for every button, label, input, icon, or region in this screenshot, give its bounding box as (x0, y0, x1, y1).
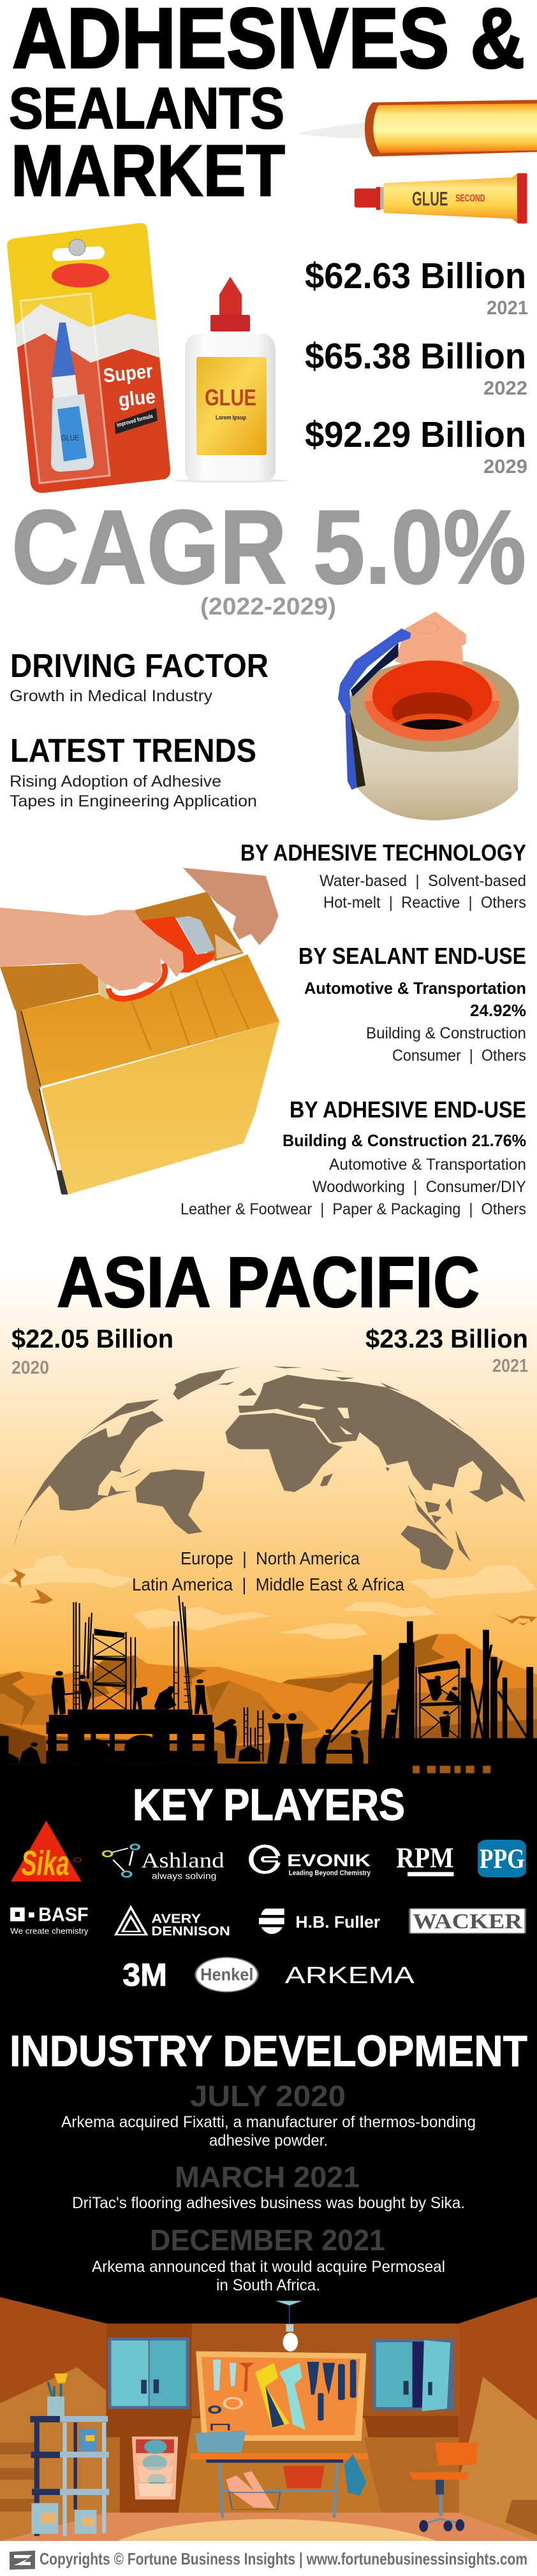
driving factor: DRIVING FACTOR (10, 648, 268, 685)
logo: Sika (11, 1821, 82, 1883)
segmentation: by sealant end-use: Consumer | Others (392, 1047, 526, 1065)
segmentation: by sealant end-use: 24.92% (470, 1001, 526, 1020)
logo: Arkema: ARKEMA (285, 1961, 415, 1988)
development: March 2021 (72, 2160, 465, 2212)
illustration: workshop (0, 2289, 537, 2542)
segmentation: by sealant end-use: Building & Construction (366, 1024, 526, 1042)
workbench (190, 2424, 368, 2518)
regional list: Europe | North America (180, 1548, 360, 1568)
regional values: 2021 (492, 1356, 528, 1376)
development: July 2020: JULY 2020 (190, 2079, 346, 2113)
icon: glue bottle (173, 277, 288, 483)
logo: Sika: Sika (21, 1844, 69, 1883)
development: March 2021: DriTac's flooring adhesives business was bought by Sika. (72, 2194, 465, 2212)
logo: PPG (478, 1840, 526, 1877)
logo: Ashland: Ashland (141, 1848, 224, 1872)
key players heading: KEY PLAYERS (133, 1780, 405, 1830)
market value figures: $92.29 Billion (305, 414, 526, 455)
cabinet left (108, 2338, 189, 2409)
regional values (11, 1324, 528, 1378)
panel: black section (0, 1779, 537, 2301)
market value figures: 2021 (487, 296, 528, 319)
regional list: Latin America | Middle East & Africa (132, 1575, 404, 1594)
title: MARKET (11, 131, 285, 212)
regional values: $22.05 Billion (11, 1324, 173, 1353)
logo: Avery Dennison (116, 1907, 230, 1938)
icon: super glue blister pack: Super (102, 360, 154, 387)
market value figures: 2022 (483, 377, 527, 399)
logo: Ashland: always solving (152, 1871, 216, 1881)
title (9, 0, 525, 212)
shelf unit (30, 2373, 109, 2536)
logo: 3M: 3M (122, 1957, 167, 1993)
title: SEALANTS (9, 76, 284, 141)
logo: Avery Dennison: DENNISON (151, 1923, 230, 1938)
icon: super glue blister pack: GLUE (61, 433, 79, 442)
icon: caulk tube (295, 100, 537, 157)
logo: Evonik: EVONIK (287, 1851, 371, 1870)
saw blade rack (132, 2436, 178, 2500)
cabinet right (372, 2339, 454, 2411)
logo: BASF: BASF (38, 1903, 89, 1925)
icon: super glue blister pack: Improved formula (116, 412, 154, 428)
icon: glue tube: GLUE (412, 187, 448, 210)
icon: tape roll with dispenser (338, 611, 519, 820)
market value figures: 2029 (483, 455, 527, 477)
market value figures (305, 256, 528, 477)
icon: fortune business insights logo (10, 2551, 35, 2570)
development: December 2021 (92, 2223, 445, 2294)
logo: BASF (10, 1903, 89, 1935)
development: December 2021: Arkema announced that it would acquire Permoseal (92, 2258, 445, 2276)
latest trends: LATEST TRENDS (10, 732, 256, 769)
segmentation: by adhesive technology: Water-based | Solvent-based (320, 872, 526, 890)
logo: H.B. Fuller (259, 1909, 380, 1934)
logo: Henkel: Henkel (200, 1965, 253, 1984)
logo: Henkel (196, 1958, 258, 1992)
development: March 2021: MARCH 2021 (175, 2160, 360, 2194)
regional values: 2020 (11, 1358, 49, 1378)
clouds (0, 1554, 537, 1640)
latest trends (10, 732, 257, 810)
segmentation: by adhesive technology (240, 840, 526, 912)
logo: H.B. Fuller: H.B. Fuller (295, 1913, 380, 1932)
development: July 2020: Arkema acquired Fixatti, a manufacturer of thermos-bonding (61, 2113, 476, 2131)
light bulb (276, 2301, 302, 2352)
latest trends: Tapes in Engineering Application (10, 792, 257, 810)
regional list (132, 1548, 404, 1594)
driving factor (10, 648, 268, 705)
icon: super glue blister pack: glue (117, 385, 156, 411)
pegboard with tools (196, 2351, 367, 2441)
segmentation: by adhesive end-use (180, 1096, 526, 1218)
CAGR: (2022-2029) (200, 593, 336, 620)
segmentation: by adhesive end-use: Building & Construction 21.76% (283, 1131, 526, 1150)
latest trends: Rising Adoption of Adhesive (10, 773, 221, 790)
photo: hands sealing cardboard box (0, 868, 279, 1195)
logo: RPM: RPM (396, 1842, 454, 1874)
icon: birds (10, 1569, 537, 1626)
icon: glue tube (355, 173, 527, 224)
logo: Evonik: Leading Beyond Chemistry (289, 1869, 371, 1877)
workers (19, 1671, 460, 1769)
logo: Avery Dennison: AVERY (151, 1911, 202, 1926)
icon: glue tube: SECOND (455, 193, 485, 204)
icon: glue bottle: GLUE (205, 384, 256, 411)
regional values: $23.23 Billion (365, 1324, 528, 1353)
logos (10, 1821, 526, 1993)
icon: glue bottle: Lorem Ipsup (216, 414, 246, 421)
logo: BASF: We create chemistry (10, 1926, 89, 1935)
mountains (0, 1634, 537, 1785)
logo: Ashland (103, 1844, 224, 1881)
development: July 2020 (61, 2079, 476, 2150)
development: December 2021: DECEMBER 2021 (150, 2223, 385, 2257)
chair (409, 2443, 478, 2532)
logo: RPM (396, 1842, 454, 1876)
icon: super glue blister pack (7, 223, 170, 493)
market value figures: $62.63 Billion (305, 256, 526, 296)
regional heading: ASIA PACIFIC (57, 1242, 480, 1322)
segmentation: by adhesive end-use: Woodworking | Consumer/DIY (313, 1178, 526, 1196)
footer (0, 2541, 537, 2576)
ceiling (0, 2289, 537, 2324)
segmentation: by adhesive technology: Hot-melt | Reactive | Others (323, 894, 526, 912)
segmentation: by sealant end-use (298, 943, 526, 1065)
silhouettes: construction site and workers (0, 1596, 537, 1785)
panel: asia pacific background (0, 1243, 537, 1785)
development: December 2021: in South Africa. (216, 2276, 320, 2294)
market value figures: $65.38 Billion (305, 336, 526, 377)
segmentation: by adhesive end-use: Automotive & Transportation (329, 1156, 526, 1174)
driving factor: Growth in Medical Industry (10, 687, 213, 705)
development: July 2020: adhesive powder. (209, 2132, 328, 2150)
world map (12, 1366, 526, 1570)
logo: Evonik (251, 1846, 371, 1877)
segmentation: by sealant end-use: Automotive & Transportation (304, 979, 526, 998)
